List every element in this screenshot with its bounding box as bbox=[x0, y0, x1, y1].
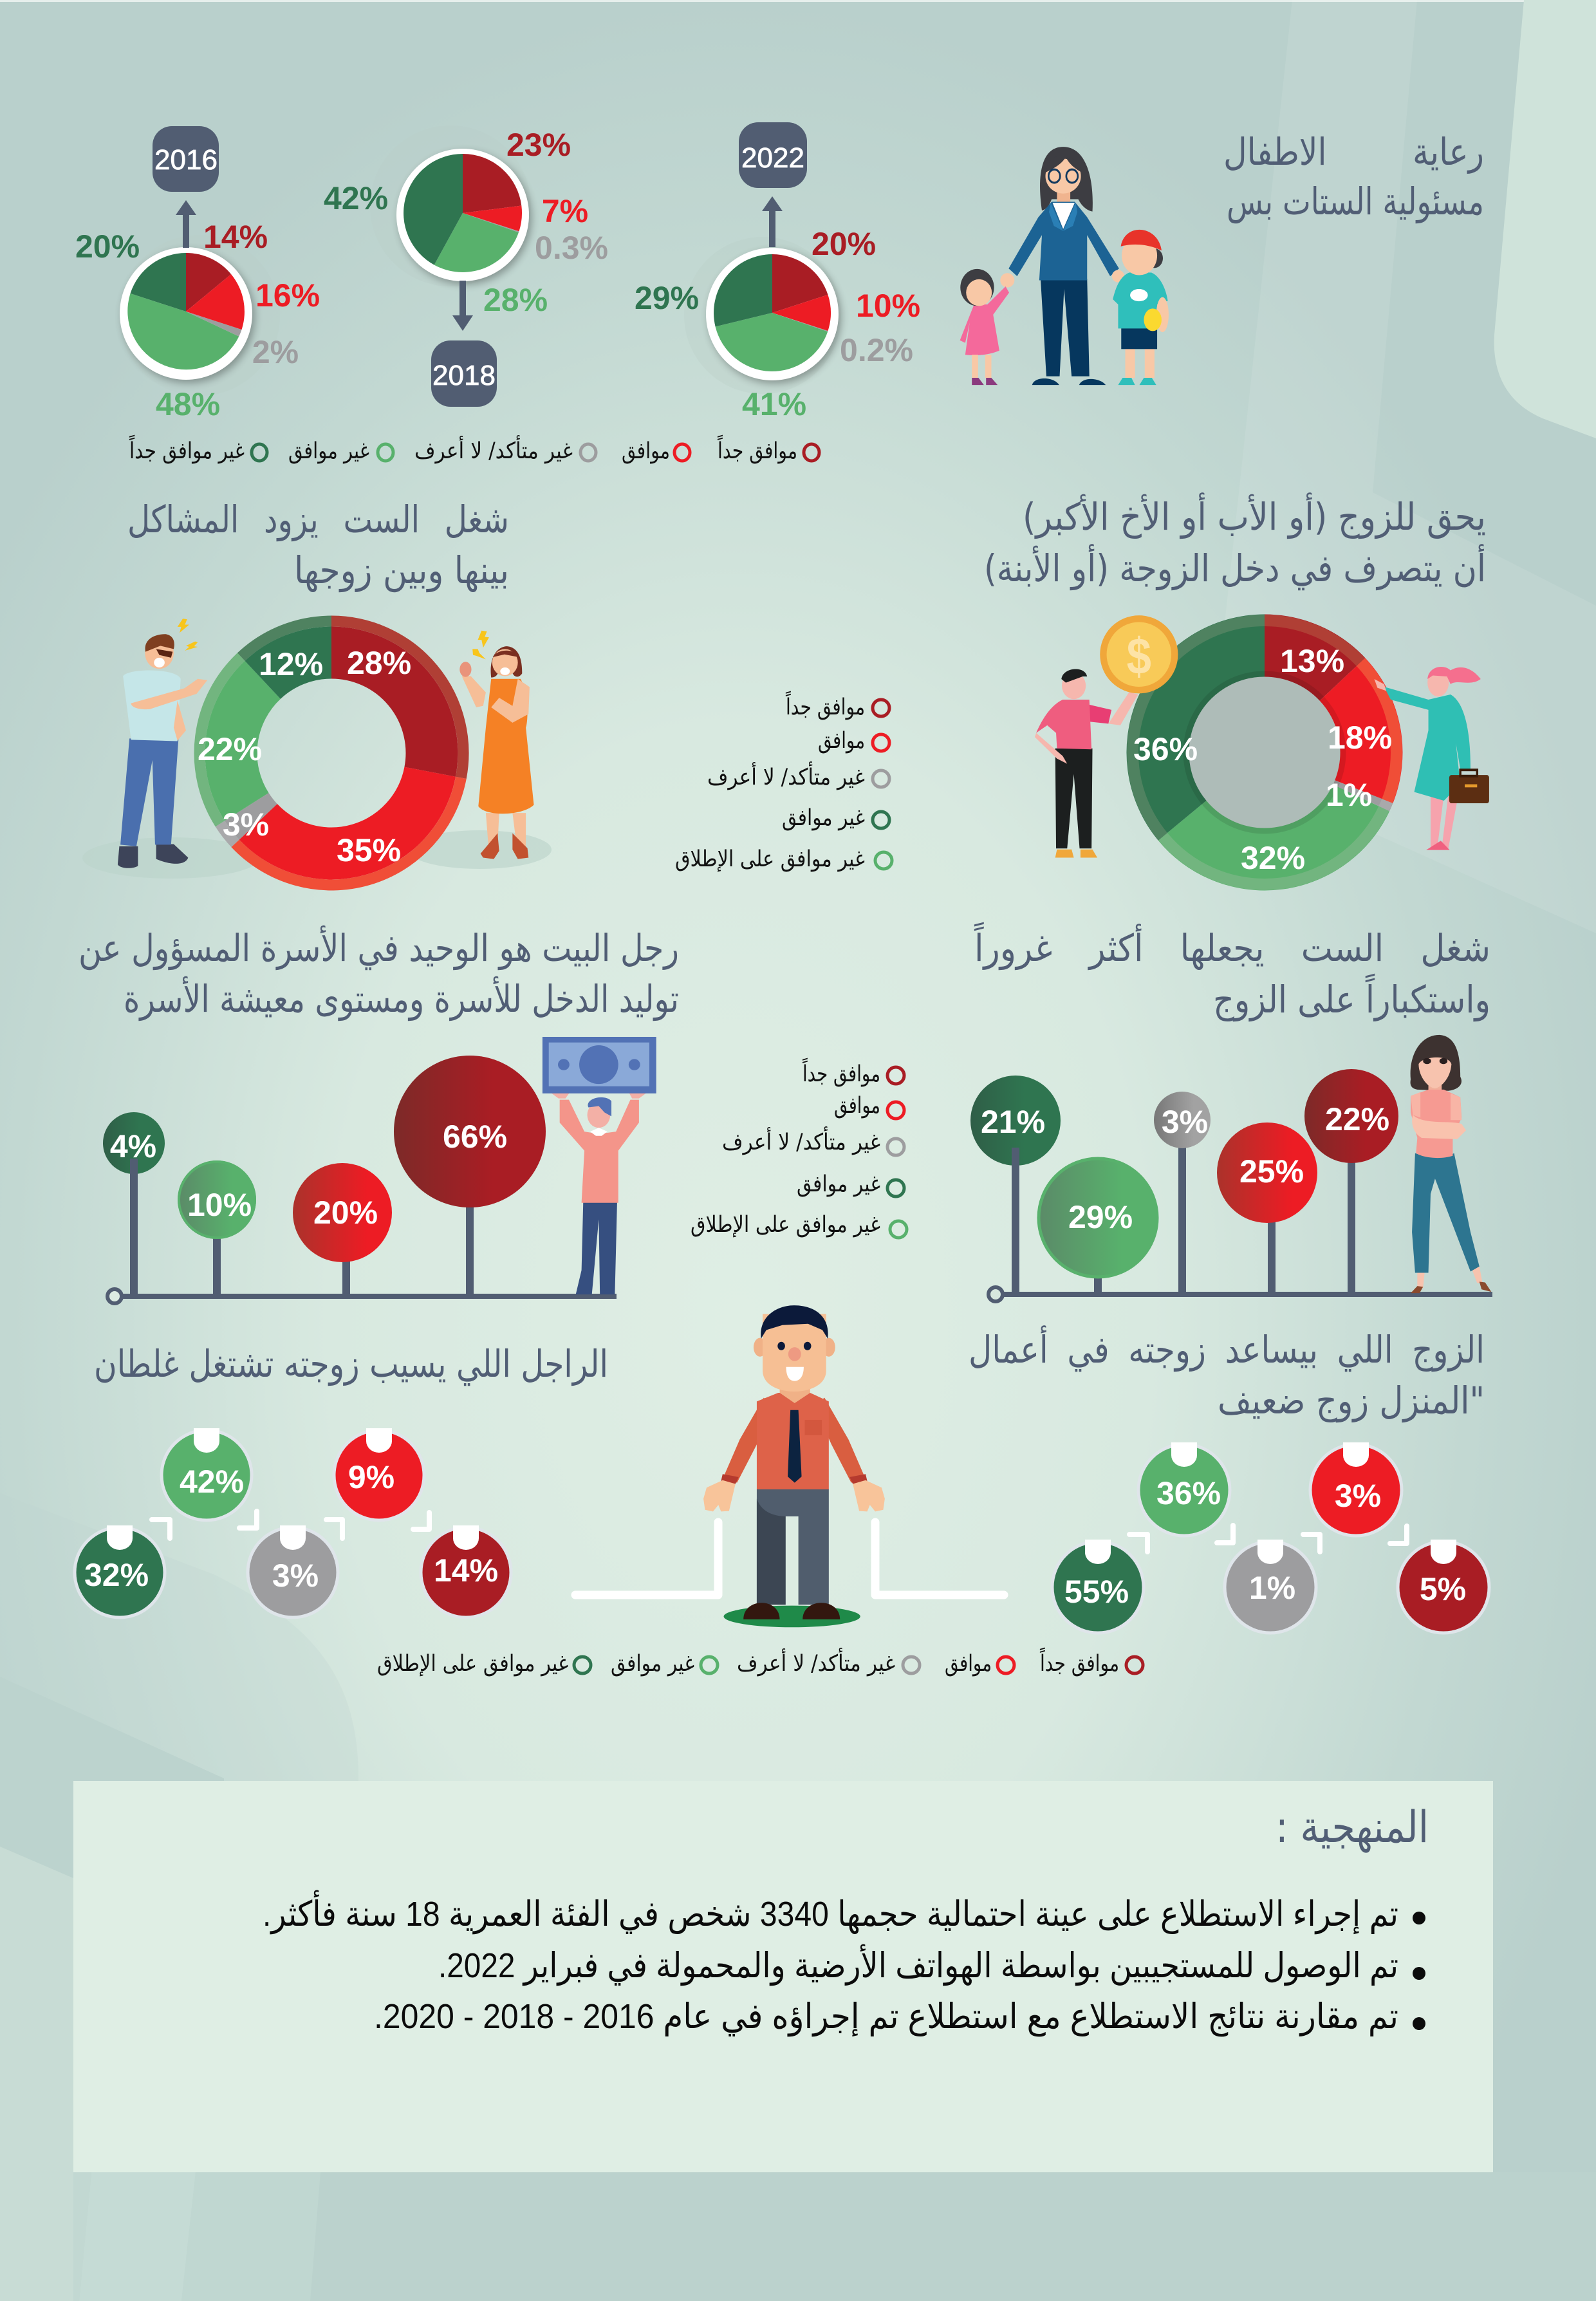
year badge 2018: 2018 bbox=[432, 360, 496, 391]
legend: donuts: موافق bbox=[818, 728, 865, 754]
heading: arrogance bbox=[974, 922, 1490, 1022]
chart: lollipop 4 10 20 66: 20% bbox=[313, 1195, 378, 1231]
heading: problems: شغل الست يزود المشاكل bbox=[127, 498, 509, 542]
icon: woman with crossed arms bbox=[1411, 1035, 1491, 1293]
chart: donut 13 18 1 32 36: 36% bbox=[1133, 731, 1198, 767]
chart: pie 2022: 10% bbox=[856, 288, 920, 324]
chart: pie 2016: 48% bbox=[156, 386, 220, 422]
heading: breadwinner: رجل البيت هو الوحيد في الأسرة المسؤول عن bbox=[79, 925, 679, 971]
chart: pie 2018: 42% bbox=[324, 180, 388, 216]
chart: circles 55 36 1 3 5: 3% bbox=[1335, 1478, 1381, 1514]
legend: lollipops: غير متأكد/ لا أعرف bbox=[722, 1126, 880, 1155]
chart: pie 2018: 23% bbox=[506, 127, 571, 163]
chart: pie 2022: 20% bbox=[812, 226, 876, 262]
chart: donut 28 35 3 22 12: 12% bbox=[259, 646, 323, 682]
legend: lollipops: موافق bbox=[834, 1093, 880, 1119]
methodology bullet 2: تم الوصول للمستجيبين بواسطة الهواتف الأرضية والمحمولة في فبراير 2022. bbox=[438, 1944, 1398, 1986]
legend: circles: غير موافق على الإطلاق bbox=[377, 1651, 568, 1677]
chart: lollipop 4 10 20 66: 10% bbox=[187, 1187, 252, 1223]
legend: circles: غير موافق bbox=[611, 1651, 694, 1677]
chart: pie 2016: 16% bbox=[255, 277, 320, 313]
panel: methodology bbox=[73, 1781, 1493, 2172]
chart: circles 32 42 3 9 14: 9% bbox=[348, 1459, 394, 1495]
panel: woman's work makes her arrogant lollipops bbox=[970, 922, 1492, 1301]
legend: circles: موافق bbox=[945, 1651, 992, 1677]
chart: pie 2018: 28% bbox=[483, 282, 548, 318]
panel: women work increases problems donut bbox=[82, 498, 552, 885]
chart: circles 55 36 1 3 5 bbox=[1052, 1442, 1489, 1633]
legend: circles bbox=[377, 1647, 1143, 1677]
heading: income control bbox=[984, 492, 1486, 591]
arrow: to 2018 bbox=[452, 281, 473, 331]
legend: lollipops bbox=[691, 1057, 907, 1238]
heading: helping husband: الزوج اللي بيساعد زوجته في أعمال bbox=[969, 1325, 1485, 1372]
heading: childcare: رعاية الاطفال bbox=[1223, 130, 1484, 174]
arrow: to 2016 bbox=[176, 200, 196, 248]
arrow: to 2022 bbox=[762, 196, 783, 247]
legend: pies: غير متأكد/ لا أعرف bbox=[414, 435, 573, 464]
heading: breadwinner: توليد الدخل للأسرة ومستوى معيشة الأسرة bbox=[124, 976, 679, 1021]
heading: breadwinner bbox=[79, 925, 679, 1021]
legend: pies: غير موافق bbox=[288, 438, 369, 464]
icon: angry man pointing bbox=[118, 619, 207, 868]
icon: mother and two children bbox=[960, 147, 1169, 385]
chart: lollipop 4 10 20 66: 66% bbox=[443, 1119, 507, 1155]
icon: man lifting banknote bbox=[543, 1037, 656, 1294]
chart: circles 32 42 3 9 14: 42% bbox=[180, 1464, 244, 1500]
legend: pies bbox=[129, 434, 819, 464]
chart: lollipop 21 29 3 25 22 bbox=[970, 1069, 1492, 1301]
icon: man holding coin: $ bbox=[1127, 628, 1151, 685]
chart: pie 2016: 20% bbox=[75, 228, 140, 265]
chart: donut 28 35 3 22 12: 28% bbox=[347, 645, 411, 681]
year badge 2018 bbox=[431, 340, 497, 407]
heading: methodology: المنهجية : bbox=[1276, 1802, 1429, 1853]
chart: pie 2022: 41% bbox=[742, 386, 806, 422]
legend: donuts: غير متأكد/ لا أعرف bbox=[707, 761, 865, 790]
chart: lollipop 21 29 3 25 22: 29% bbox=[1068, 1199, 1133, 1235]
legend: pies: غير موافق جداً bbox=[129, 434, 245, 464]
legend: donuts bbox=[675, 691, 892, 872]
heading: arrogance: واستكباراً على الزوج bbox=[1213, 973, 1490, 1022]
methodology bullet 3: تم مقارنة نتائج الاستطلاع مع استطلاع تم إجراؤه في عام 2016 - 2018 - 2020. bbox=[374, 1997, 1398, 2037]
icon: central man with tie bbox=[703, 1305, 885, 1627]
panel: husband controls income donut bbox=[984, 492, 1489, 884]
heading: income control: يحق للزوج (أو الأب أو الأخ الأكبر) bbox=[1023, 492, 1486, 539]
chart: donut 13 18 1 32 36 bbox=[1133, 620, 1396, 884]
chart: donut 28 35 3 22 12 bbox=[198, 621, 463, 885]
chart: pie 2022: 29% bbox=[635, 280, 699, 316]
icon: man holding coin bbox=[1035, 615, 1178, 858]
chart: pie 2018: 7% bbox=[542, 193, 588, 229]
icon: angry woman in orange dress bbox=[459, 631, 534, 859]
heading: wrong husband: الراجل اللي يسيب زوجته تشتغل غلطان bbox=[94, 1342, 608, 1386]
chart: circles 32 42 3 9 14 bbox=[75, 1428, 511, 1617]
chart: donut 13 18 1 32 36: 18% bbox=[1328, 720, 1392, 756]
chart: donut 13 18 1 32 36: 32% bbox=[1241, 840, 1305, 876]
chart: circles 55 36 1 3 5: 55% bbox=[1064, 1574, 1129, 1610]
heading: problems bbox=[127, 498, 509, 593]
chart: pie 2022 bbox=[635, 226, 920, 422]
legend: lollipops: موافق جداً bbox=[802, 1057, 880, 1087]
chart: lollipop 21 29 3 25 22: 21% bbox=[981, 1104, 1045, 1140]
chart: circles 55 36 1 3 5: 36% bbox=[1156, 1475, 1221, 1511]
chart: lollipop 21 29 3 25 22: 25% bbox=[1239, 1153, 1304, 1189]
heading: childcare: مسئولية الستات بس bbox=[1227, 180, 1484, 224]
year badge 2022 bbox=[739, 122, 807, 188]
chart: lollipop 21 29 3 25 22: 22% bbox=[1325, 1101, 1389, 1137]
heading: helping husband: "المنزل زوج ضعيف bbox=[1218, 1379, 1485, 1423]
panel: man who lets wife work circles bbox=[75, 1342, 608, 1617]
year badge 2016 bbox=[153, 126, 219, 192]
heading: problems: بينها وبين زوجها bbox=[294, 548, 509, 593]
methodology bullet 1: تم إجراء الاستطلاع على عينة احتمالية حجمها 3340 شخص في الفئة العمرية 18 سنة فأكثر. bbox=[263, 1890, 1398, 1934]
year badge 2016: 2016 bbox=[154, 144, 218, 176]
heading: arrogance: شغل الست يجعلها أكثر غروراً bbox=[974, 922, 1490, 971]
chart: donut 13 18 1 32 36: 1% bbox=[1326, 777, 1372, 813]
central brackets bbox=[575, 1522, 1004, 1595]
chart: circles 55 36 1 3 5: 5% bbox=[1420, 1571, 1466, 1607]
chart: donut 13 18 1 32 36: 13% bbox=[1280, 643, 1344, 679]
legend: donuts: غير موافق على الإطلاق bbox=[675, 846, 865, 872]
legend: pies: موافق bbox=[622, 438, 670, 464]
panel: childcare pies bbox=[75, 122, 1484, 464]
chart: pie 2016 bbox=[75, 219, 320, 422]
chart: donut 28 35 3 22 12: 35% bbox=[337, 832, 401, 868]
chart: pie 2022: 0.2% bbox=[840, 332, 913, 368]
legend: lollipops: غير موافق على الإطلاق bbox=[691, 1212, 880, 1238]
chart: circles 32 42 3 9 14: 32% bbox=[84, 1557, 149, 1593]
chart: lollipop 4 10 20 66: 4% bbox=[110, 1128, 156, 1164]
legend: donuts: موافق جداً bbox=[785, 691, 865, 720]
legend: circles: موافق جداً bbox=[1039, 1647, 1119, 1677]
heading: income control: أن يتصرف في دخل الزوجة (أو الأبنة) bbox=[984, 544, 1486, 591]
chart: lollipop 4 10 20 66 bbox=[103, 1056, 617, 1303]
heading: childcare bbox=[1223, 130, 1484, 224]
chart: lollipop 21 29 3 25 22: 3% bbox=[1162, 1104, 1208, 1140]
chart: circles 55 36 1 3 5: 1% bbox=[1249, 1570, 1295, 1606]
panel: husband helps at home circles bbox=[969, 1325, 1489, 1633]
legend: pies: موافق جداً bbox=[717, 434, 797, 464]
chart: pie 2018: 0.3% bbox=[535, 230, 608, 266]
chart: donut 28 35 3 22 12: 3% bbox=[223, 806, 269, 843]
legend: donuts: غير موافق bbox=[782, 805, 865, 831]
year badge 2022: 2022 bbox=[741, 142, 804, 174]
chart: pie 2016: 14% bbox=[203, 219, 268, 255]
chart: pie 2018 bbox=[324, 127, 608, 318]
chart: circles 32 42 3 9 14: 3% bbox=[272, 1558, 319, 1594]
legend: circles: غير متأكد/ لا أعرف bbox=[737, 1648, 895, 1677]
chart: donut 28 35 3 22 12: 22% bbox=[198, 731, 262, 767]
heading: helping husband bbox=[969, 1325, 1485, 1423]
icon: woman with briefcase bbox=[1375, 667, 1489, 850]
chart: circles 32 42 3 9 14: 14% bbox=[434, 1552, 498, 1588]
panel: man sole breadwinner lollipops bbox=[79, 925, 679, 1303]
chart: pie 2016: 2% bbox=[252, 334, 299, 370]
floor shadows bbox=[82, 830, 552, 879]
legend: lollipops: غير موافق bbox=[797, 1171, 880, 1197]
